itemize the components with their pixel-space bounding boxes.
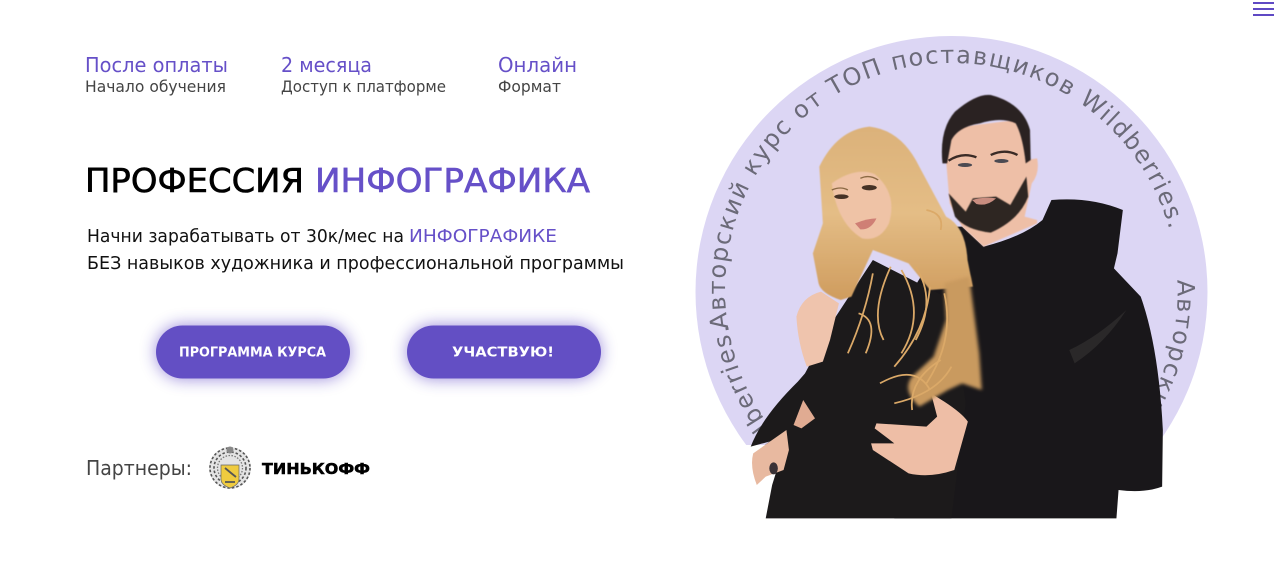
info item: platform access: 2 месяца	[281, 53, 372, 77]
woman eyes	[834, 185, 877, 199]
button: participate: УЧАСТВУЮ!	[452, 344, 554, 360]
subtitle text: Начни зарабатывать от 30к/мес на	[87, 227, 404, 247]
woman sleeve and body	[751, 260, 966, 518]
man hand	[871, 393, 968, 475]
man beard	[949, 177, 1028, 233]
info item: format	[498, 53, 577, 96]
info item: start of training: После оплаты	[85, 53, 228, 77]
info item: start of training: Начало обучения	[85, 77, 226, 96]
man hoodie	[894, 199, 1163, 518]
woman lips	[855, 218, 876, 229]
subtitle text: ИНФОГРАФИКЕ	[409, 227, 557, 247]
woman face	[832, 172, 891, 239]
menu icon	[1253, 2, 1274, 16]
subtitle text	[87, 227, 624, 274]
man brows	[949, 152, 1017, 161]
info item: platform access: Доступ к платформе	[281, 77, 446, 96]
tinkoff wordmark: ТИНЬКОФФ	[262, 460, 370, 478]
woman hair	[813, 127, 973, 300]
woman hand upper	[796, 292, 839, 367]
info item: format: Формат	[498, 77, 561, 96]
circular text: Авторский курс от ТОП поставщиков Wildberries.	[717, 280, 1195, 445]
icon: tinkoff crest	[209, 446, 251, 489]
man face and neck	[946, 120, 1038, 247]
button: participate	[407, 325, 601, 379]
info item: format: Онлайн	[498, 53, 577, 77]
woman hand lower	[752, 430, 789, 485]
man eyes	[958, 159, 1009, 167]
button: course program: ПРОГРАММА КУРСА	[179, 344, 327, 360]
hair lower mass	[908, 277, 982, 407]
woman nail	[769, 462, 778, 474]
title	[85, 161, 590, 200]
circular text	[710, 50, 1195, 445]
button: course program	[156, 325, 350, 379]
partners label: Партнеры:	[86, 456, 192, 480]
title: ИНФОГРАФИКА	[315, 161, 590, 200]
circular text: Авторский курс от ТОП поставщиков Wildberries.	[710, 50, 1178, 328]
woman brows	[832, 177, 878, 190]
hair curls	[848, 210, 951, 410]
title: ПРОФЕССИЯ	[85, 161, 304, 200]
subtitle text: БЕЗ навыков художника и профессиональной программы	[87, 254, 624, 274]
man sleeve shade	[1069, 310, 1126, 363]
lilac circle with circular text	[696, 36, 1208, 445]
man hair	[942, 95, 1031, 163]
photo: couple	[751, 95, 1163, 518]
info item: start of training	[85, 53, 228, 96]
man lips	[972, 198, 996, 205]
info item: platform access	[281, 53, 446, 96]
